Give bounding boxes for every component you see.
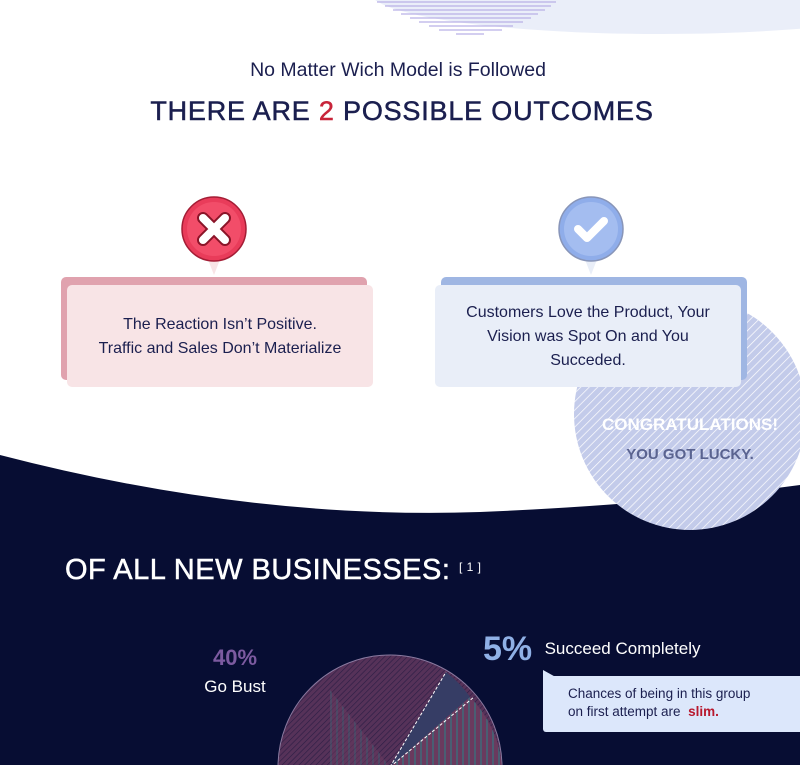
callout: congratulations — [602, 415, 778, 463]
callout: slim chances — [543, 670, 800, 732]
callout: congratulations: CONGRATULATIONS! — [602, 415, 778, 434]
callout: congratulations: YOU GOT LUCKY. — [626, 446, 754, 463]
heading: THERE ARE 2 POSSIBLE OUTCOMES — [150, 96, 654, 126]
icon: cross — [181, 196, 247, 274]
callout: slim chances: on first attempt are slim. — [568, 704, 719, 719]
text — [466, 304, 710, 369]
text: Succeded. — [550, 352, 626, 369]
section heading: OF ALL NEW BUSINESSES: [ 1 ] — [65, 554, 482, 586]
icon: check — [558, 196, 624, 274]
label: 40% go bust: 40% — [213, 645, 257, 670]
label: 5% succeed: 5% Succeed Completely — [483, 630, 701, 668]
panel: negative outcome — [61, 196, 373, 387]
dark section — [0, 455, 800, 765]
callout: slim chances: Chances of being in this group — [568, 686, 750, 701]
text: Traffic and Sales Don’t Materialize — [99, 340, 341, 357]
subtitle: No Matter Wich Model is Followed — [250, 59, 546, 81]
label: 40% go bust — [204, 645, 266, 696]
text: The Reaction Isn’t Positive. — [123, 316, 317, 333]
text: Vision was Spot On and You — [487, 328, 689, 345]
pie chart — [278, 655, 502, 765]
panel: positive outcome — [435, 196, 747, 387]
lucky circle — [574, 298, 800, 530]
text: Customers Love the Product, Your — [466, 304, 710, 321]
label: 40% go bust: Go Bust — [204, 677, 266, 696]
top decoration — [370, 0, 800, 34]
text — [99, 316, 341, 357]
